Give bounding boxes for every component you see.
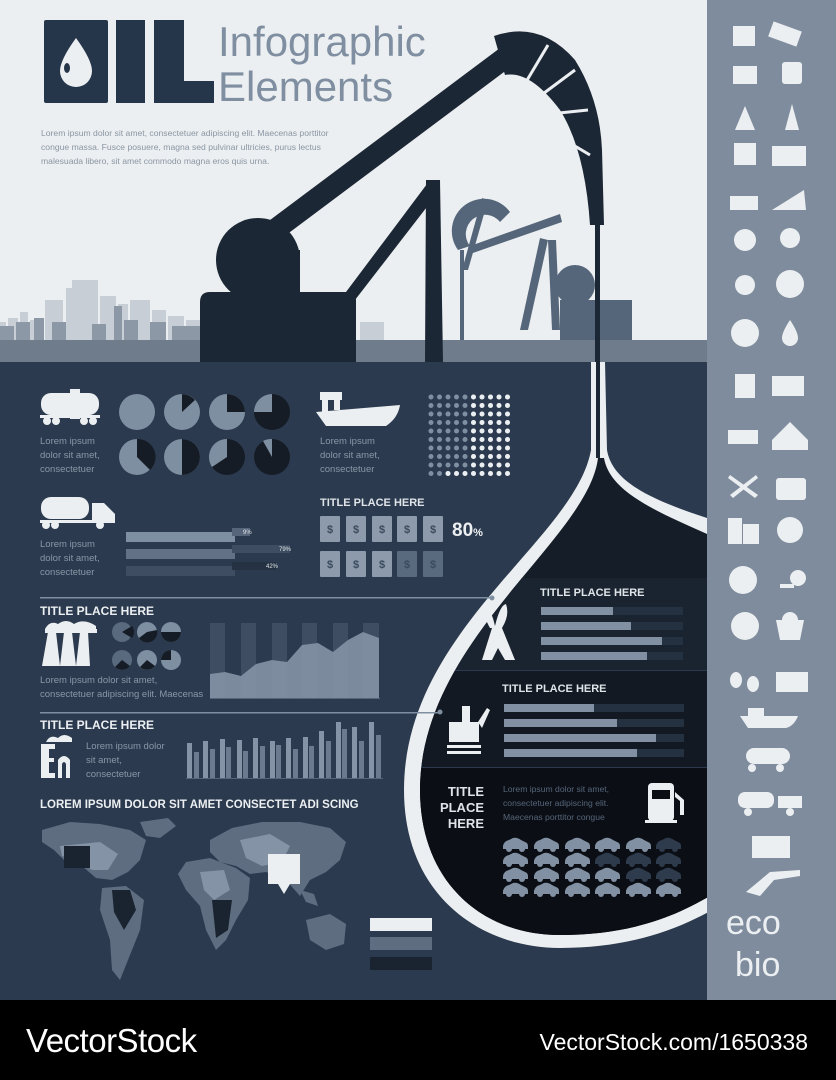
I (116, 20, 145, 103)
barrels with 80%: $ (353, 524, 359, 536)
drop section 3: Lorem ipsum dolor sit amet, (503, 784, 609, 794)
cars (503, 838, 681, 897)
text: factory: Lorem ipsum dolor sit amet, (40, 675, 157, 686)
horizontal bars: 79% (279, 547, 292, 553)
icon: tanker ship (316, 392, 400, 426)
icon: tank train (40, 389, 100, 425)
eco bio text: eco (726, 904, 781, 942)
footer bar (0, 1000, 836, 1080)
text: train: dolor sit amet, (40, 450, 100, 461)
title text: Elements (218, 63, 393, 110)
area chart (210, 623, 380, 699)
text: train: Lorem ipsum (40, 436, 95, 447)
barrels with 80%: $ (327, 524, 333, 536)
icon: oil rig (447, 706, 490, 754)
text: power plant: consectetuer (86, 769, 140, 780)
text: ship: dolor sit amet, (320, 450, 380, 461)
base (200, 292, 356, 362)
pie charts (119, 394, 290, 475)
cable (595, 150, 600, 460)
sidebar (707, 0, 836, 1000)
barrel O (44, 20, 108, 103)
oil drop (404, 362, 707, 948)
horizontal bars (126, 528, 292, 576)
map heading: LOREM IPSUM DOLOR SIT AMET CONSECTET ADI SCING (40, 799, 359, 811)
drop section 3: PLACE (440, 800, 484, 815)
barrels with 80%: 80% (452, 520, 483, 541)
horizontal bars: 42% (266, 564, 279, 570)
text: power plant: Lorem ipsum dolor (86, 741, 165, 752)
horizon band (0, 340, 707, 362)
icon: power plant (41, 735, 72, 778)
drop section 3: consectetuer adipiscing elit. (503, 798, 609, 808)
intro text: congue massa. Fusce posuere, magna sed pulvinar ultricies, purus lectus (41, 142, 321, 152)
connector line 1 (40, 596, 494, 600)
counterweight (216, 218, 300, 302)
text: factory: consectetuer adipiscing elit. Maecenas (40, 689, 203, 700)
main dark background (0, 362, 836, 1002)
drop section 3 (440, 783, 684, 897)
text: factory (40, 675, 203, 700)
sidebar icons (728, 21, 808, 896)
text: train: consectetuer (40, 464, 94, 475)
pump jack silhouette (200, 31, 604, 362)
L (154, 20, 184, 103)
text: ship (320, 436, 380, 475)
barrels with 80%: TITLE PLACE HERE (320, 497, 425, 509)
barrels with 80%: $ (379, 524, 385, 536)
intro text: malesuada libero, sit amet commodo magna eros quis urna. (41, 156, 269, 166)
text: ship: consectetuer (320, 464, 374, 475)
drop section 3: HERE (448, 816, 484, 831)
text: truck (40, 539, 100, 578)
heading 3: TITLE PLACE HERE (40, 718, 154, 732)
drop section 2 (447, 683, 684, 757)
heading 2: TITLE PLACE HERE (40, 604, 154, 618)
connector line 2 (40, 710, 442, 714)
title text (218, 18, 426, 110)
barrels with 80%: $ (430, 524, 436, 536)
intro text (41, 128, 329, 166)
footer url: VectorStock.com/1650338 (540, 1029, 808, 1055)
samson post legs (425, 180, 443, 362)
icon: fuel pump (645, 783, 684, 823)
barrels with 80%: $ (404, 524, 410, 536)
icon: factory (42, 621, 97, 666)
drop section 3: Maecenas porttitor congue (503, 812, 605, 822)
callout (268, 854, 300, 894)
horse head spokes (520, 45, 590, 155)
text: ship: Lorem ipsum (320, 436, 375, 447)
icon: tanker truck (40, 497, 115, 529)
city skyline (0, 280, 384, 340)
eco bio text (726, 904, 781, 984)
barrels with 80%: $ (327, 559, 333, 571)
walking beam (230, 48, 512, 268)
eco bio text: bio (735, 946, 780, 984)
small pies (112, 622, 181, 670)
top light background (0, 0, 836, 362)
crank arm (250, 250, 300, 300)
barrels with 80%: $ (404, 559, 410, 571)
text: power plant (86, 741, 165, 780)
footer text: VectorStock (26, 1022, 198, 1059)
drop section 3: TITLE (448, 784, 484, 799)
barrels with 80%: $ (379, 559, 385, 571)
dot grid (428, 394, 513, 478)
barrels with 80%: $ (353, 559, 359, 571)
title block: OIL (44, 20, 214, 103)
drop section 2: TITLE PLACE HERE (502, 683, 607, 695)
icon: oil gusher (482, 604, 515, 660)
title text: Infographic (218, 18, 426, 65)
text: train (40, 436, 100, 475)
text: truck: dolor sit amet, (40, 553, 100, 564)
horse head (494, 31, 604, 225)
barrels with 80%: $ (430, 559, 436, 571)
small pump jack (background) (452, 198, 632, 340)
text: truck: Lorem ipsum (40, 539, 95, 550)
drop section 1 (482, 587, 683, 660)
drop section 1: TITLE PLACE HERE (540, 587, 645, 599)
grouped bar chart (186, 722, 383, 779)
horizontal bars: 9% (243, 530, 252, 536)
intro text: Lorem ipsum dolor sit amet, consectetuer adipiscing elit. Maecenas porttitor (41, 128, 329, 138)
barrels with 80% (320, 497, 483, 577)
text: truck: consectetuer (40, 567, 94, 578)
text: power plant: sit amet, (86, 755, 122, 766)
legend (370, 918, 432, 970)
world map (42, 818, 346, 980)
